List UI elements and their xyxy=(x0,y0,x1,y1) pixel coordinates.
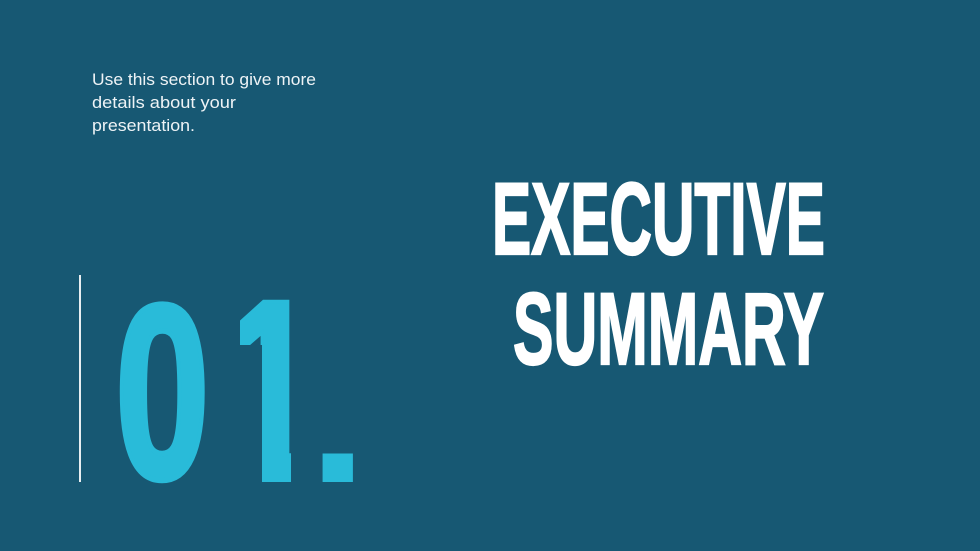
intro text block: presentation. xyxy=(92,116,195,135)
vertical divider line xyxy=(79,275,81,482)
section number 01. xyxy=(120,300,353,484)
title xyxy=(492,162,825,386)
intro text block xyxy=(92,70,316,135)
section number 01.: . xyxy=(308,310,368,523)
intro text block: Use this section to give more xyxy=(92,70,316,89)
intro text block: details about your xyxy=(92,93,236,112)
section number 01.: 1 xyxy=(218,246,323,538)
section number 01.: 0 xyxy=(115,254,210,532)
